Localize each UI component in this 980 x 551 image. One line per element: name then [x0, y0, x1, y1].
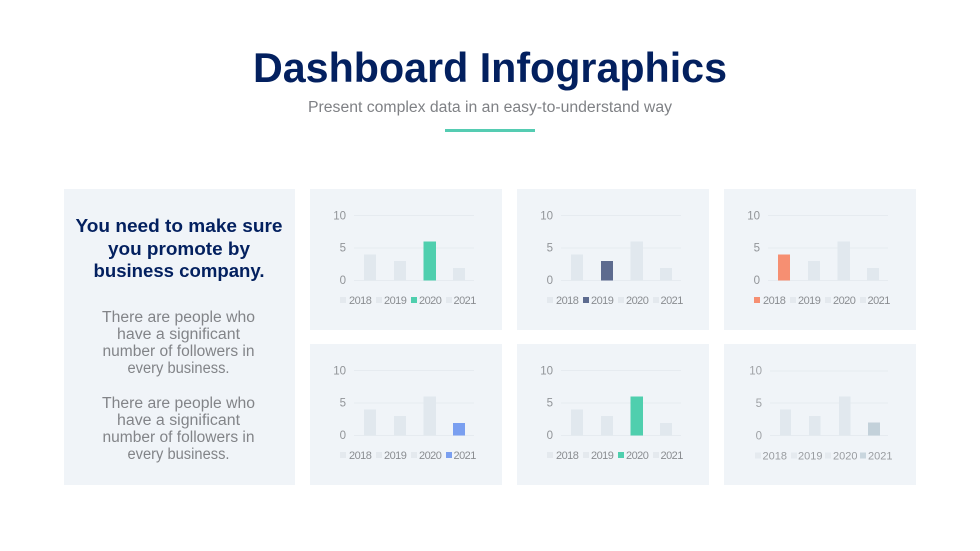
heading: you promote by	[108, 238, 251, 259]
panel: chart 6: 10	[749, 366, 762, 378]
text block 1: There are people who	[102, 309, 255, 326]
legend	[547, 450, 683, 462]
panel: chart 2: 5	[547, 242, 553, 254]
legend: 2020	[626, 450, 649, 462]
heading	[76, 215, 282, 281]
legend: 2019	[384, 450, 407, 462]
legend: 2021	[660, 295, 683, 307]
bar chart	[364, 396, 465, 436]
header	[253, 44, 727, 132]
subtitle: Present complex data in an easy-to-understand way	[308, 99, 672, 116]
panel: chart 5: 0	[547, 430, 553, 442]
panel: chart 6: 0	[756, 430, 762, 442]
legend: 2019	[798, 450, 822, 462]
legend	[340, 295, 476, 307]
legend: 2018	[556, 450, 579, 462]
panel: chart 1: 10	[333, 210, 346, 222]
legend: 2019	[591, 295, 614, 307]
panel: chart 2: 10	[540, 210, 553, 222]
panel: chart 4	[310, 344, 502, 485]
legend: 2020	[419, 295, 442, 307]
panel: chart 3	[724, 189, 916, 330]
legend	[547, 295, 683, 307]
bar chart	[571, 396, 672, 436]
legend: 2019	[591, 450, 614, 462]
legend: 2019	[798, 295, 821, 307]
panel: chart 2: 0	[547, 275, 553, 287]
text block 1	[102, 309, 255, 377]
panel: chart 6	[724, 344, 916, 485]
heading: business company.	[94, 260, 264, 281]
panel: chart 2	[517, 189, 709, 330]
legend: 2018	[763, 295, 786, 307]
text block 2: every business.	[128, 446, 230, 463]
legend: 2021	[868, 295, 890, 307]
legend: 2021	[454, 450, 476, 462]
text block 2	[102, 395, 255, 463]
text block 1: have a significant	[117, 326, 241, 343]
legend: 2020	[626, 295, 649, 307]
legend	[340, 450, 476, 462]
text block 2: have a significant	[117, 412, 241, 429]
text block 1: number of followers in	[102, 343, 254, 360]
heading: You need to make sure	[76, 215, 282, 236]
legend: 2018	[556, 295, 579, 307]
legend: 2018	[349, 450, 372, 462]
panel: chart 5	[517, 344, 709, 485]
legend	[755, 450, 892, 462]
panel: chart 3: 10	[747, 210, 760, 222]
title: Dashboard Infographics	[253, 44, 727, 91]
panel: chart 5: 10	[540, 366, 553, 378]
panel: chart 4: 10	[333, 366, 346, 378]
panel: chart 4: 5	[340, 398, 346, 410]
legend: 2018	[349, 295, 372, 307]
panel: chart 5: 5	[547, 398, 553, 410]
text block 2: number of followers in	[102, 429, 254, 446]
panel: chart 3: 5	[754, 242, 760, 254]
legend: 2018	[762, 450, 787, 462]
legend: 2021	[660, 450, 683, 462]
panel: chart 1	[310, 189, 502, 330]
panel: chart 1: 0	[340, 275, 346, 287]
panel: chart 6: 5	[756, 398, 762, 410]
panel: text column	[64, 189, 295, 485]
panel: chart 3: 0	[754, 275, 760, 287]
legend: 2019	[384, 295, 407, 307]
bar chart	[780, 396, 880, 436]
bar chart	[571, 242, 672, 280]
panel: chart 4: 0	[340, 430, 346, 442]
bar chart	[778, 242, 879, 280]
legend: 2020	[833, 295, 856, 307]
text block 1: every business.	[128, 360, 230, 377]
legend	[754, 295, 890, 307]
legend: 2021	[868, 450, 892, 462]
legend: 2020	[833, 450, 857, 462]
bar chart	[364, 242, 465, 280]
accent underline	[445, 129, 535, 132]
legend: 2020	[419, 450, 442, 462]
text block 2: There are people who	[102, 395, 255, 412]
legend: 2021	[454, 295, 476, 307]
panel: chart 1: 5	[340, 242, 346, 254]
